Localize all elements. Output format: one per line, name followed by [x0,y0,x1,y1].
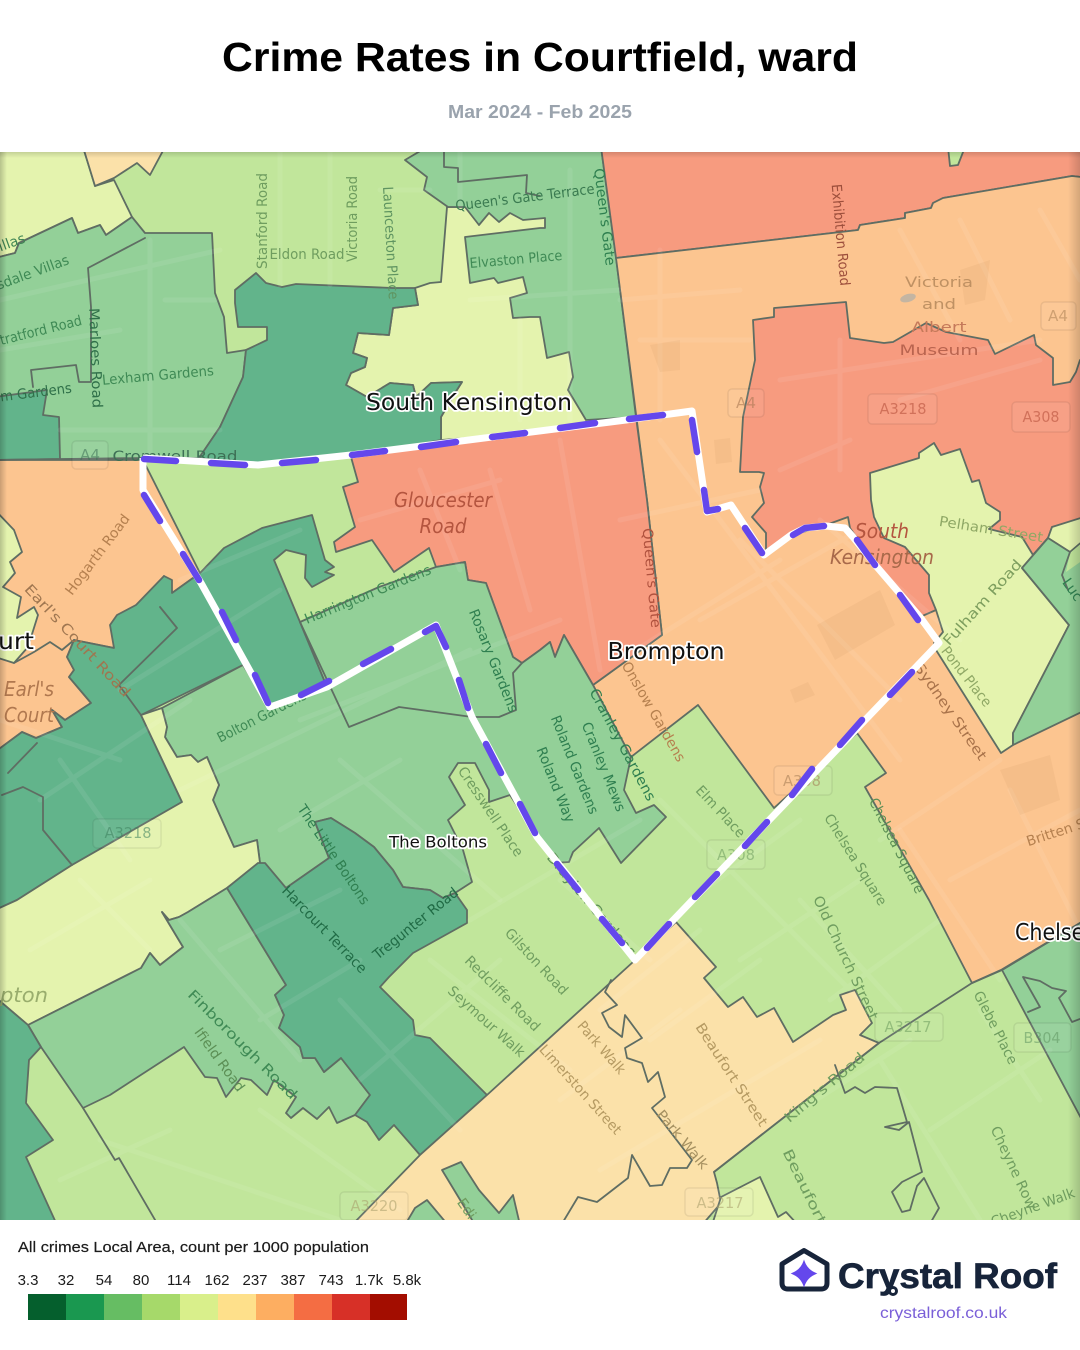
area: Gloucester Road salmon [334,417,662,685]
area: east corner yellow [1048,515,1080,552]
street labels: The Little Boltons [293,801,372,908]
area: yellow pocket south [712,1177,798,1225]
road shields: A4 [1048,307,1068,325]
street labels: Queen's Gate Terrace [455,182,595,214]
street labels: m Gardens [0,381,73,405]
street labels: Roland Gardens [547,713,601,817]
area: south-west dark strip [0,997,57,1225]
street labels: Lexham Gardens [102,363,214,389]
street labels: Launceston Place [379,186,401,300]
road shields: A3217 [696,1194,744,1212]
area: south-east medium green [1002,918,1080,1135]
area: west dark green [0,515,334,910]
subtitle: date range: Mar 2024 - Feb 2025 [448,102,632,122]
street labels: Victoria Road [345,176,361,262]
street labels: Redcliffe Road [461,953,543,1035]
area: Harcourt Terrace [227,818,487,1155]
legend colour bar [28,1294,407,1320]
legend scale labels: 237 [242,1272,268,1289]
area: west orange [0,460,200,752]
area: north salmon band [601,147,1080,258]
label: Earl's Court [4,677,55,727]
legend scale labels: 54 [96,1272,112,1289]
area: Lexham Gardens [0,217,246,460]
area: dark west of Lexham [0,390,60,460]
pond in museum grounds [899,292,917,304]
legend scale labels: 1.7k [355,1272,384,1289]
street labels: Marloes Road [85,308,105,408]
area: Pelham yellow [870,443,1069,753]
map: crime rate choropleth [0,152,1080,1220]
street labels: Beaufort Street [692,1020,771,1130]
legend scale labels: 114 [167,1272,191,1289]
street labels: Onslow Gardens [618,659,688,765]
area: north-west yellow [0,147,132,258]
legend scale labels: 387 [280,1272,306,1289]
icon: Crystal Roof house logo [782,1250,827,1289]
area: south green pocket two [405,1200,448,1225]
label: South Kensington station: Kensington [830,545,934,569]
area: north-west peach corner [83,147,165,186]
area: South Kensington north [346,207,640,440]
street labels: Park Walk [574,1018,629,1078]
road shields: B304 [1024,1029,1060,1047]
label: Earl's Court: Earl's [4,677,54,701]
label: Victoria and Albert Museum: and [922,297,956,313]
street labels: Seymour Walk [444,983,528,1061]
boundary lines [0,147,1080,1225]
street labels: Harcourt Terrace [278,883,370,977]
title: Crime Rates in Courtfield, ward [222,34,858,80]
street labels: Ifield Road [190,1025,248,1095]
building patches [650,260,1060,815]
street labels: Roland Way [533,745,577,825]
street labels: Exhibition Road [828,183,852,287]
street labels: Rosary Gardens [465,607,521,715]
area: orange Brompton and Museums [593,176,1080,983]
label: West Brompton: pton [0,983,48,1007]
road shields: A3218 [104,824,152,842]
street labels: Drayton Gardens [543,850,639,960]
streets: faint road network [0,152,1080,1220]
street labels: Chelsea Square [820,811,890,909]
road shields: A308 [717,846,755,864]
website url: crystalroof.co.uk [880,1305,1008,1322]
road shields: A4 [80,446,100,464]
street labels: Cresswell Place [454,764,526,860]
logo wordmark: Crystal Roof [838,1257,1057,1296]
street labels: Hogarth Road [62,511,134,599]
legend scale labels: 3.3 [18,1272,38,1289]
area: West Brompton yellow [0,708,260,1025]
road shields: A3220 [350,1197,398,1215]
road shields [72,302,1076,1220]
road shields: A4 [736,394,756,412]
area: east medium green [1013,535,1080,745]
label: Victoria and Albert Museum: Victoria [905,275,973,291]
street labels: Earl's Court Road [21,581,133,701]
street labels: Cromwell Road [112,449,238,465]
edge shading [0,152,1080,1220]
street labels: Tregunter Road [369,885,462,964]
label: The Boltons: The Boltons [388,832,487,852]
area: Harrington and The Boltons [162,562,666,898]
road shields: A308 [783,772,821,790]
street labels: Pond Place [938,644,994,710]
street labels: Cranley Mews [578,720,628,814]
label: Earl's Court: Court [4,703,55,727]
road shields: A3217 [884,1018,932,1036]
street labels: Glebe Place [970,989,1020,1067]
street labels: Harrington Gardens [302,562,434,628]
legend scale labels: 5.8k [393,1272,422,1289]
label: Victoria and Albert Museum: Museum [900,343,978,359]
area: rail lands [199,273,462,465]
label: South Kensington: South Kensington [366,390,572,416]
legend scale labels: 162 [204,1272,230,1289]
street labels: Beaufort [779,1147,829,1220]
street labels [0,167,1080,1231]
street labels: Gilston Road [501,925,571,999]
street labels: Fulham Road [940,557,1026,649]
road shields: A308 [1022,408,1060,426]
street labels: King's Road [782,1050,868,1126]
street labels: Chelsea Square [865,796,927,896]
area: south green pockets [442,1162,520,1225]
label: Victoria and Albert Museum: Albert [912,320,967,336]
legend title: All crimes Local Area, count per 1000 population [18,1239,369,1256]
label: Brompton: Brompton [608,639,724,665]
area: Finborough [28,888,370,1123]
street labels: Old Church Street [809,893,881,1023]
street labels: Elm Place [692,783,748,841]
label: Gloucester Road [394,488,494,538]
street labels: Queen's Gate [639,527,663,629]
label: South Kensington station: South [855,519,909,543]
label: Victoria and Albert Museum [900,275,978,359]
street labels: tratford Road [0,313,84,349]
area: south peach [352,922,879,1225]
label: Gloucester Road: Gloucester [394,488,494,512]
street labels: Elvaston Place [469,248,563,272]
street labels: Limerston Street [536,1042,625,1138]
street labels: Bolton Gardens [215,688,309,746]
area: small green north [948,147,965,166]
legend scale labels [18,1272,422,1289]
area: far east light strip [1066,536,1080,572]
street labels: Cranley Gardens [586,686,658,804]
street labels: Queen's Gate [590,167,618,267]
street labels: Cheyne Row [987,1124,1039,1212]
label: Gloucester Road: Road [420,514,467,538]
area: west jagged yellow [0,510,38,663]
street labels: Finborough Road [184,987,300,1103]
area: base light green [0,152,1080,1220]
street labels: Pelham Street [938,514,1045,546]
label: South Kensington station [830,519,934,569]
road shields: A3218 [880,400,926,418]
legend scale labels: 32 [58,1272,74,1289]
street labels: Park Walk [653,1107,712,1173]
legend scale labels: 743 [318,1272,344,1289]
area: Queen's Gate [405,147,636,420]
street labels: Eldon Road [270,247,344,263]
ward boundary route [143,411,939,960]
street labels: Stanford Road [255,173,271,269]
area: salmon Museum quarter [740,302,1080,617]
legend scale labels: 80 [133,1272,149,1289]
street labels: Sydney Street [910,660,990,764]
